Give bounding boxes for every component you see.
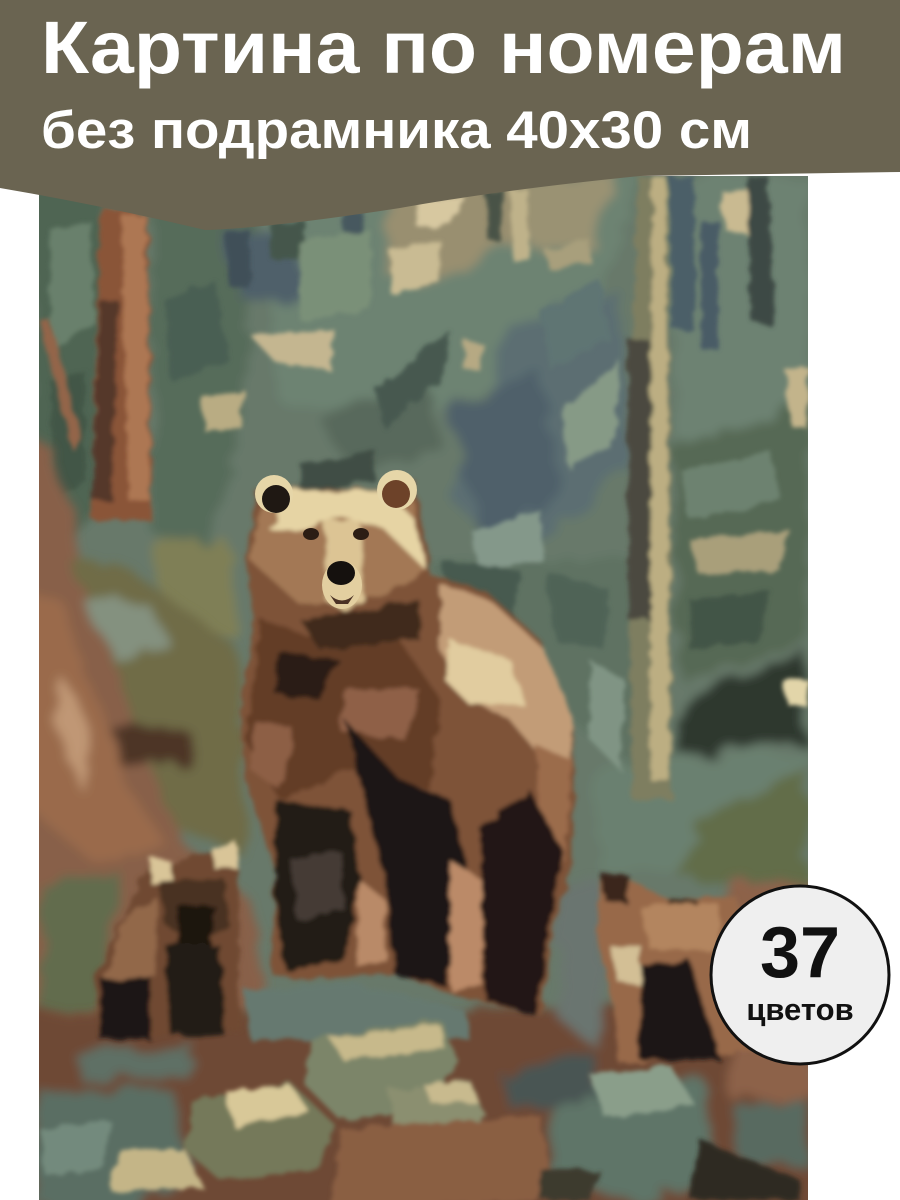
light back	[440, 585, 574, 790]
color count badge: 37	[760, 913, 840, 993]
ears	[255, 475, 293, 513]
forest floor and rocks	[20, 880, 820, 1200]
forest background	[39, 176, 808, 1111]
eyes and muzzle	[303, 528, 319, 540]
subtitle: без подрамника 40х30 см	[41, 101, 752, 160]
body silhouette	[240, 480, 574, 1015]
color count badge: цветов	[746, 992, 854, 1027]
lower left ground and root	[39, 436, 268, 1018]
header banner	[0, 0, 900, 230]
mother bear	[240, 470, 574, 1015]
dark legs	[275, 800, 360, 970]
light and shadow strokes in forest	[50, 176, 808, 770]
cub right	[597, 872, 760, 1065]
title: Картина по номерам	[41, 6, 846, 89]
color count badge	[711, 886, 889, 1064]
cub left	[95, 842, 240, 1040]
head highlights	[250, 490, 425, 605]
chest	[245, 620, 440, 800]
tree trunks	[39, 176, 672, 800]
